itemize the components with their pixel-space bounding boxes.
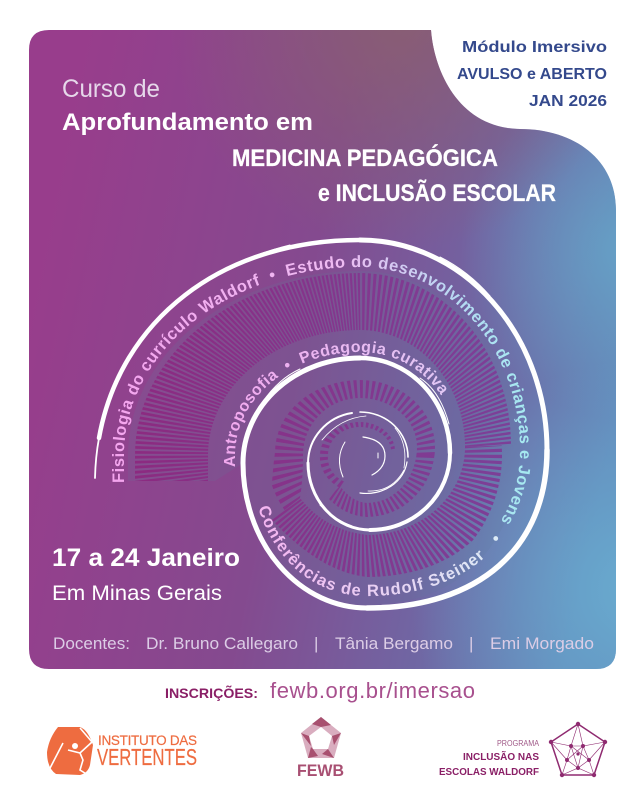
faculty line: Tânia Bergamo (335, 634, 453, 653)
registration line: fewb.org.br/imersao (270, 678, 475, 703)
slate tint of the spiral interior (128, 271, 520, 605)
logo text: Programa Inclusão nas Escolas Waldorf: INCLUSÃO NAS (463, 750, 539, 763)
logo text: Programa Inclusão nas Escolas Waldorf: PROGRAMA (497, 738, 539, 748)
badge: module info: AVULSO e ABERTO (457, 66, 607, 83)
curved text: outer spiral: Fisiologia do currículo Waldorf • Estudo do desenvolvimento de crianças e Jovens (112, 255, 530, 524)
registration line: INSCRIÇÕES: (165, 684, 258, 701)
logo: Instituto das Vertentes: INSTITUTO DAS (98, 733, 197, 748)
logo: Instituto das Vertentes: VERTENTES (97, 744, 197, 770)
curved text: lower spiral: Conferências de Rudolf Steiner • (260, 506, 498, 596)
outer hatch band, right half (360, 273, 511, 447)
curved text: inner spiral: Antroposofia • Pedagogia curativa (224, 341, 446, 467)
date and location (52, 544, 240, 605)
badge: module info: JAN 2026 (529, 93, 607, 110)
faculty line: Dr. Bruno Callegaro (146, 634, 298, 653)
logo text: Programa Inclusão nas Escolas Waldorf: ESCOLAS WALDORF (439, 767, 539, 778)
date and location: 17 a 24 Janeiro (52, 544, 240, 572)
faculty line: | (469, 634, 473, 653)
inner hatch band (332, 425, 392, 485)
faculty line: | (314, 634, 318, 653)
faculty line (53, 634, 594, 653)
logo: FEWB: FEWB (297, 761, 344, 780)
logo: Instituto das Vertentes (47, 727, 197, 775)
badge: module info: Módulo Imersivo (462, 39, 607, 56)
faculty line: Docentes: (53, 634, 130, 653)
title: Curso de (62, 75, 160, 103)
faculty line: Emi Morgado (490, 634, 594, 653)
title: Aprofundamento em (62, 109, 313, 136)
outer hatch band, left half (135, 273, 360, 481)
icon: polyhedron network (549, 722, 607, 777)
title: e INCLUSÃO ESCOLAR (318, 179, 556, 207)
title (62, 75, 556, 207)
panel: gradient background (29, 30, 616, 669)
registration line (165, 678, 475, 703)
lower hatch band (282, 375, 442, 535)
title: MEDICINA PEDAGÓGICA (232, 144, 498, 172)
badge: module info (457, 39, 607, 110)
logo: FEWB (297, 717, 344, 780)
chart: spiral with radial hatch bands (95, 240, 547, 625)
date and location: Em Minas Gerais (52, 582, 222, 605)
middle hatch band (302, 395, 422, 515)
logo text: Programa Inclusão nas Escolas Waldorf (439, 738, 539, 778)
white brush spiral line (95, 240, 547, 608)
